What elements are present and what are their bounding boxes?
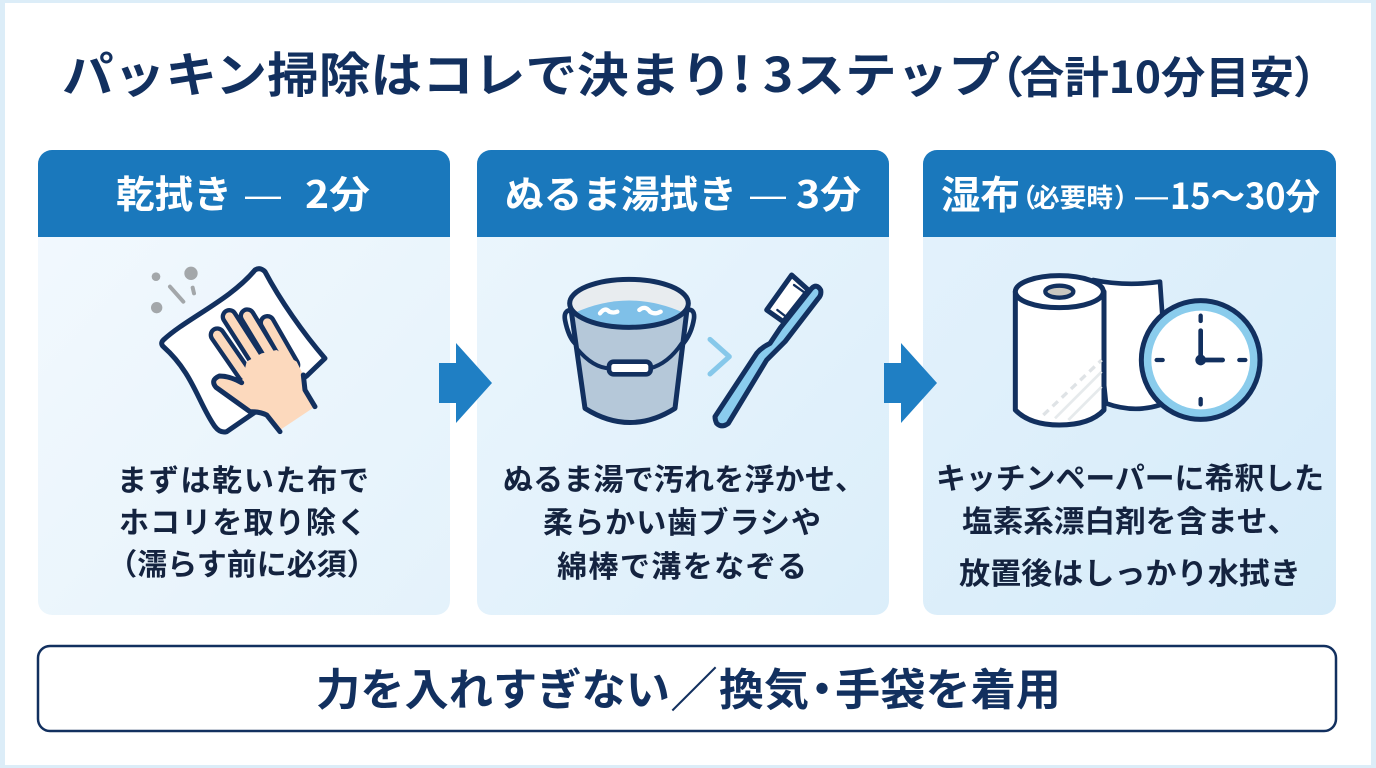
step 3 header <box>923 150 1336 237</box>
arrow: step 1 to 2 <box>439 343 492 423</box>
panel: step 3 compress <box>923 150 1336 615</box>
title <box>62 36 1337 106</box>
step 1 description: ホコリを取り除く <box>119 498 367 542</box>
step 2 header: ぬるま湯拭き <box>505 164 737 219</box>
step 3 header: ） <box>1114 178 1140 215</box>
step 3 header: （ <box>1010 178 1036 215</box>
title: パッキン掃除はコレで決まり! 3ステップ <box>62 36 1000 106</box>
step 3 description: キッチンペーパーに希釈した <box>936 454 1324 498</box>
step 3 header: 湿布 <box>941 165 1020 221</box>
title: ） <box>1293 42 1337 106</box>
callout: safety reminder: 手袋を着用 <box>835 654 1061 718</box>
icon: hand wiping with cloth <box>151 267 325 432</box>
step 3 header: — <box>1135 177 1168 214</box>
step 3 header: 必要時 <box>1033 178 1113 215</box>
callout: safety reminder <box>38 646 1336 731</box>
callout: safety reminder: ／ <box>670 651 718 721</box>
title: （ <box>980 42 1024 106</box>
step 1 description: （濡らす前に必須） <box>107 540 377 584</box>
icon: chevron <box>710 339 729 374</box>
icon: toothbrush <box>715 275 821 426</box>
callout: safety reminder: 換気 <box>719 654 809 718</box>
callout: safety reminder: ・ <box>800 654 844 718</box>
step 2 description: 綿棒で溝をなぞる <box>557 542 807 586</box>
icon: bucket <box>565 279 694 422</box>
arrow: step 2 to 3 <box>884 343 937 423</box>
panel: step 2 lukewarm wipe <box>477 150 889 615</box>
step 3 description: 塩素系漂白剤を含ませ、 <box>962 497 1298 541</box>
panel: step 1 dry wipe <box>38 150 450 615</box>
step 2 header: 3分 <box>796 164 861 219</box>
step 1 description: まずは乾いた布で <box>117 456 369 500</box>
icon: paper towel roll <box>1015 276 1162 425</box>
step 3 header: 15〜30分 <box>1170 168 1320 220</box>
step 1 header <box>38 150 450 237</box>
step 3 description: 放置後はしっかり水拭き <box>959 549 1301 593</box>
callout: safety reminder: 力を入れすぎない <box>316 654 670 718</box>
icon: clock <box>1141 301 1260 419</box>
step 1 header: — <box>245 174 281 215</box>
step 1 header: 乾拭き <box>116 164 232 219</box>
step 3 description <box>936 454 1324 593</box>
step 2 description: 柔らかい歯ブラシや <box>543 498 821 542</box>
step 2 description <box>503 455 865 586</box>
title: 合計10分目安 <box>1020 42 1294 106</box>
step 2 header <box>477 150 889 237</box>
step 1 description <box>107 456 377 584</box>
step 2 header: — <box>750 174 786 215</box>
step 1 header: 2分 <box>305 164 370 219</box>
step 2 description: ぬるま湯で汚れを浮かせ、 <box>503 455 865 499</box>
